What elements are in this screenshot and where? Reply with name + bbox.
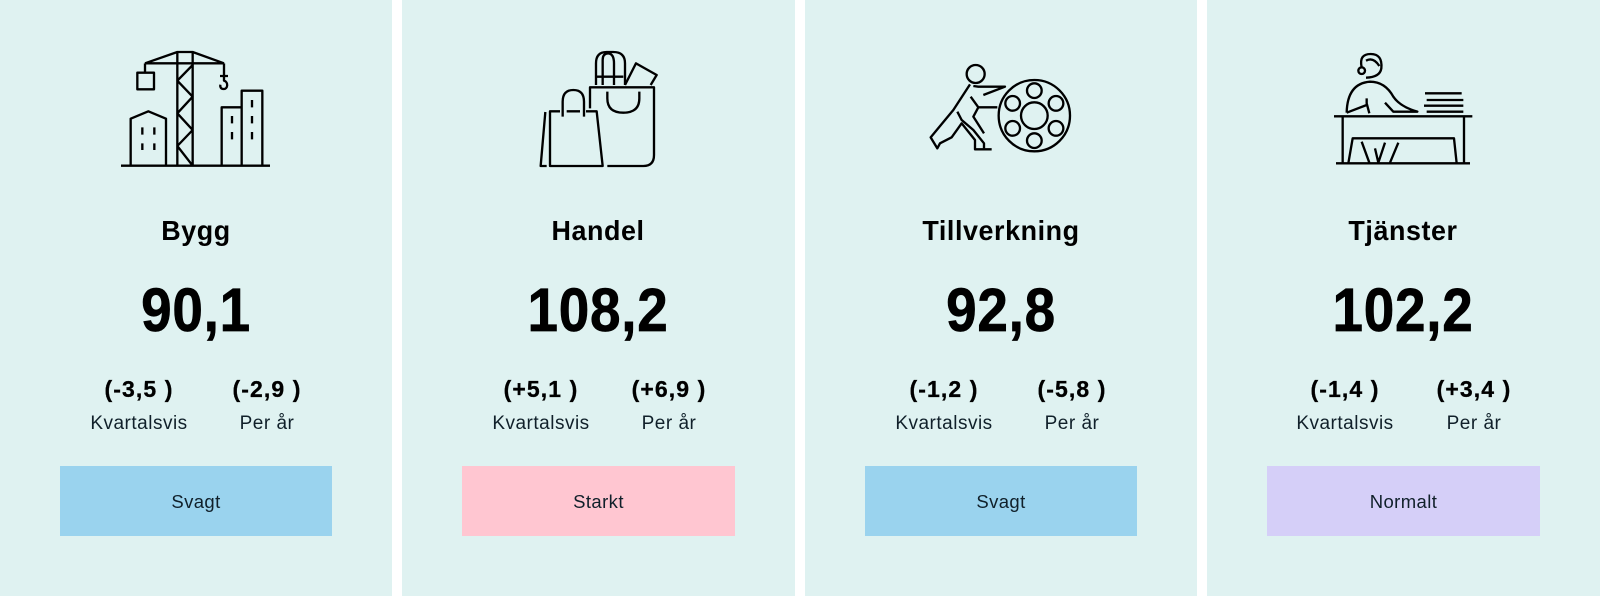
heading: Handel: Handel <box>551 215 645 246</box>
yearly change: (-5,8 ) <box>1037 376 1107 402</box>
label: Kvartalsvis: Kvartalsvis <box>90 413 188 434</box>
value: 90,1: 90,1 <box>141 276 251 344</box>
icon: shopping bags <box>540 50 658 168</box>
icon: worker pushing a reel <box>930 64 1072 152</box>
status badge: Normalt <box>1267 466 1540 536</box>
label: Kvartalsvis: Kvartalsvis <box>895 413 993 434</box>
label: Kvartalsvis: Kvartalsvis <box>1296 413 1394 434</box>
status badge: Svagt <box>60 466 332 536</box>
label: Per år: Per år <box>240 413 294 434</box>
status badge: Normalt: Normalt <box>1370 491 1437 512</box>
quarterly change: (-1,4 ) <box>1310 376 1380 402</box>
panel: Bygg <box>0 0 392 596</box>
status badge: Svagt: Svagt <box>976 491 1026 512</box>
yearly change: (+6,9 ) <box>632 376 706 402</box>
yearly change: (+3,4 ) <box>1437 376 1511 402</box>
heading: Bygg: Bygg <box>161 215 231 246</box>
value: 108,2: 108,2 <box>528 276 668 344</box>
icon: construction crane and buildings <box>121 50 270 167</box>
panel: Tillverkning <box>805 0 1197 596</box>
icon: person working at desk <box>1334 52 1472 164</box>
value: 102,2: 102,2 <box>1333 276 1473 344</box>
quarterly change: (-3,5 ) <box>104 376 174 402</box>
status badge: Starkt: Starkt <box>573 491 624 512</box>
label: Kvartalsvis: Kvartalsvis <box>492 413 590 434</box>
label: Per år: Per år <box>1045 413 1099 434</box>
yearly change: (-2,9 ) <box>232 376 302 402</box>
heading: Tillverkning: Tillverkning <box>922 215 1080 246</box>
status badge: Starkt <box>462 466 735 536</box>
label: Per år: Per år <box>1447 413 1501 434</box>
panel: Tjänster <box>1207 0 1600 596</box>
value: 92,8: 92,8 <box>946 276 1056 344</box>
label: Per år: Per år <box>642 413 696 434</box>
quarterly change: (-1,2 ) <box>909 376 979 402</box>
quarterly change: (+5,1 ) <box>504 376 578 402</box>
heading: Tjänster: Tjänster <box>1348 215 1458 246</box>
panel: Handel <box>402 0 795 596</box>
status badge: Svagt: Svagt <box>171 491 221 512</box>
status badge: Svagt <box>865 466 1137 536</box>
